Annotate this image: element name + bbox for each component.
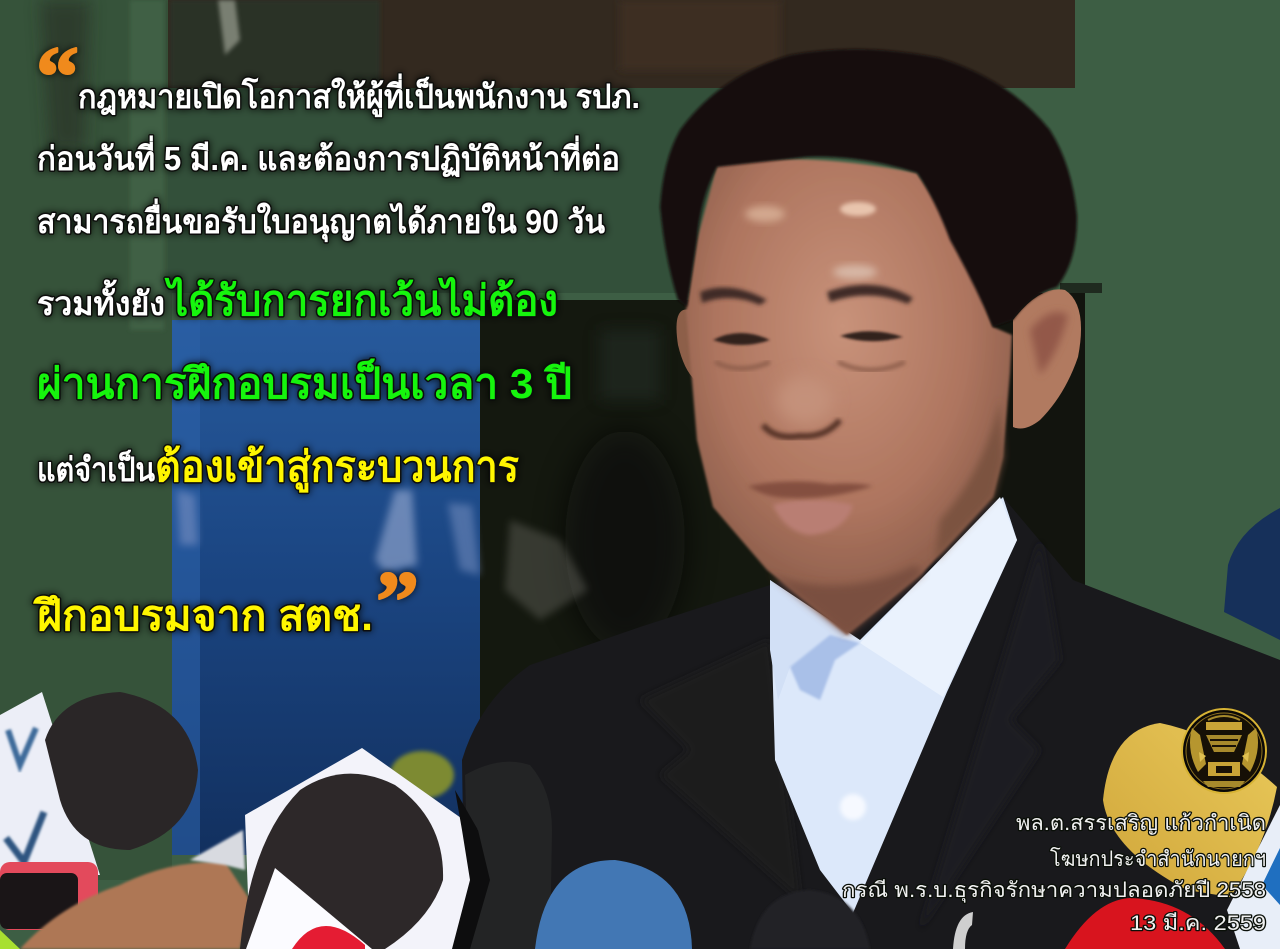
yellow mic [1103,723,1277,897]
ear right [1013,289,1081,428]
speaker role: โฆษกประจำสำนักนายกฯ [1050,847,1266,871]
subject: กรณี พ.ร.บ.ธุรกิจรักษาความปลอดภัยปี 2558 [842,879,1266,903]
dark mic behind [465,762,552,949]
opening quote mark: “ [36,28,79,124]
ear left [676,309,695,380]
blue panel [172,320,588,855]
white flag centre [245,748,478,949]
centre black mic [240,774,443,949]
line 7 yellow: ฝึกอบรมจาก สตช. [33,592,373,639]
phone [0,862,98,930]
speaker name: พล.ต.สรรเสริญ แก้วกำเนิด [1016,812,1266,835]
forehead highlights [840,202,876,216]
hand [20,862,250,949]
cheek shading [935,400,1003,560]
line 1: กฎหมายเปิดโอกาสให้ผู้ที่เป็นพนักงาน รปภ. [78,73,640,118]
eyebrows [700,288,767,305]
line 4 green: ได้รับการยกเว้นไม่ต้อง [164,276,558,324]
paper [190,830,245,870]
olive mic [390,751,454,799]
mic clip [452,790,490,949]
line 5 green: ผ่านการฝึกอบรมเป็นเวลา 3 ปี [37,358,572,407]
left black mic [45,692,198,850]
line 2: ก่อนวันที่ 5 มี.ค. และต้องการปฏิบัติหน้าที่ต่อ [37,135,620,177]
tie pin [953,912,973,949]
line 6 white: แต่จำเป็น [37,449,155,488]
eye creases [715,362,905,370]
red mic [1065,898,1225,949]
person: speaker [462,49,1280,949]
face [686,159,1012,635]
quote text block [33,28,640,649]
white flag bottom [246,868,372,949]
black mic right bottom [750,890,870,949]
white blue flag [1227,805,1280,949]
chin shading [767,565,923,635]
attribution caption [842,812,1266,935]
line 3: สามารถยื่นขอรับใบอนุญาตได้ภายใน 90 วัน [37,198,605,243]
date: 13 มี.ค. 2559 [1130,912,1266,935]
microphones [0,692,1280,949]
blue mic [535,860,692,949]
closing quote mark: ” [376,553,419,649]
hair [660,49,1077,327]
line 4 white: รวมทั้งยัง [37,279,165,322]
blue shoulder at right edge [1224,508,1280,640]
nose [763,420,840,437]
line 6 yellow: ต้องเข้าสู่กระบวนการ [155,443,519,493]
left white mic flag [0,692,100,875]
shirt [770,497,1017,913]
mouth [773,500,853,535]
seal emblem [1182,709,1266,793]
eyes [713,333,770,345]
suit jacket [462,497,1280,949]
